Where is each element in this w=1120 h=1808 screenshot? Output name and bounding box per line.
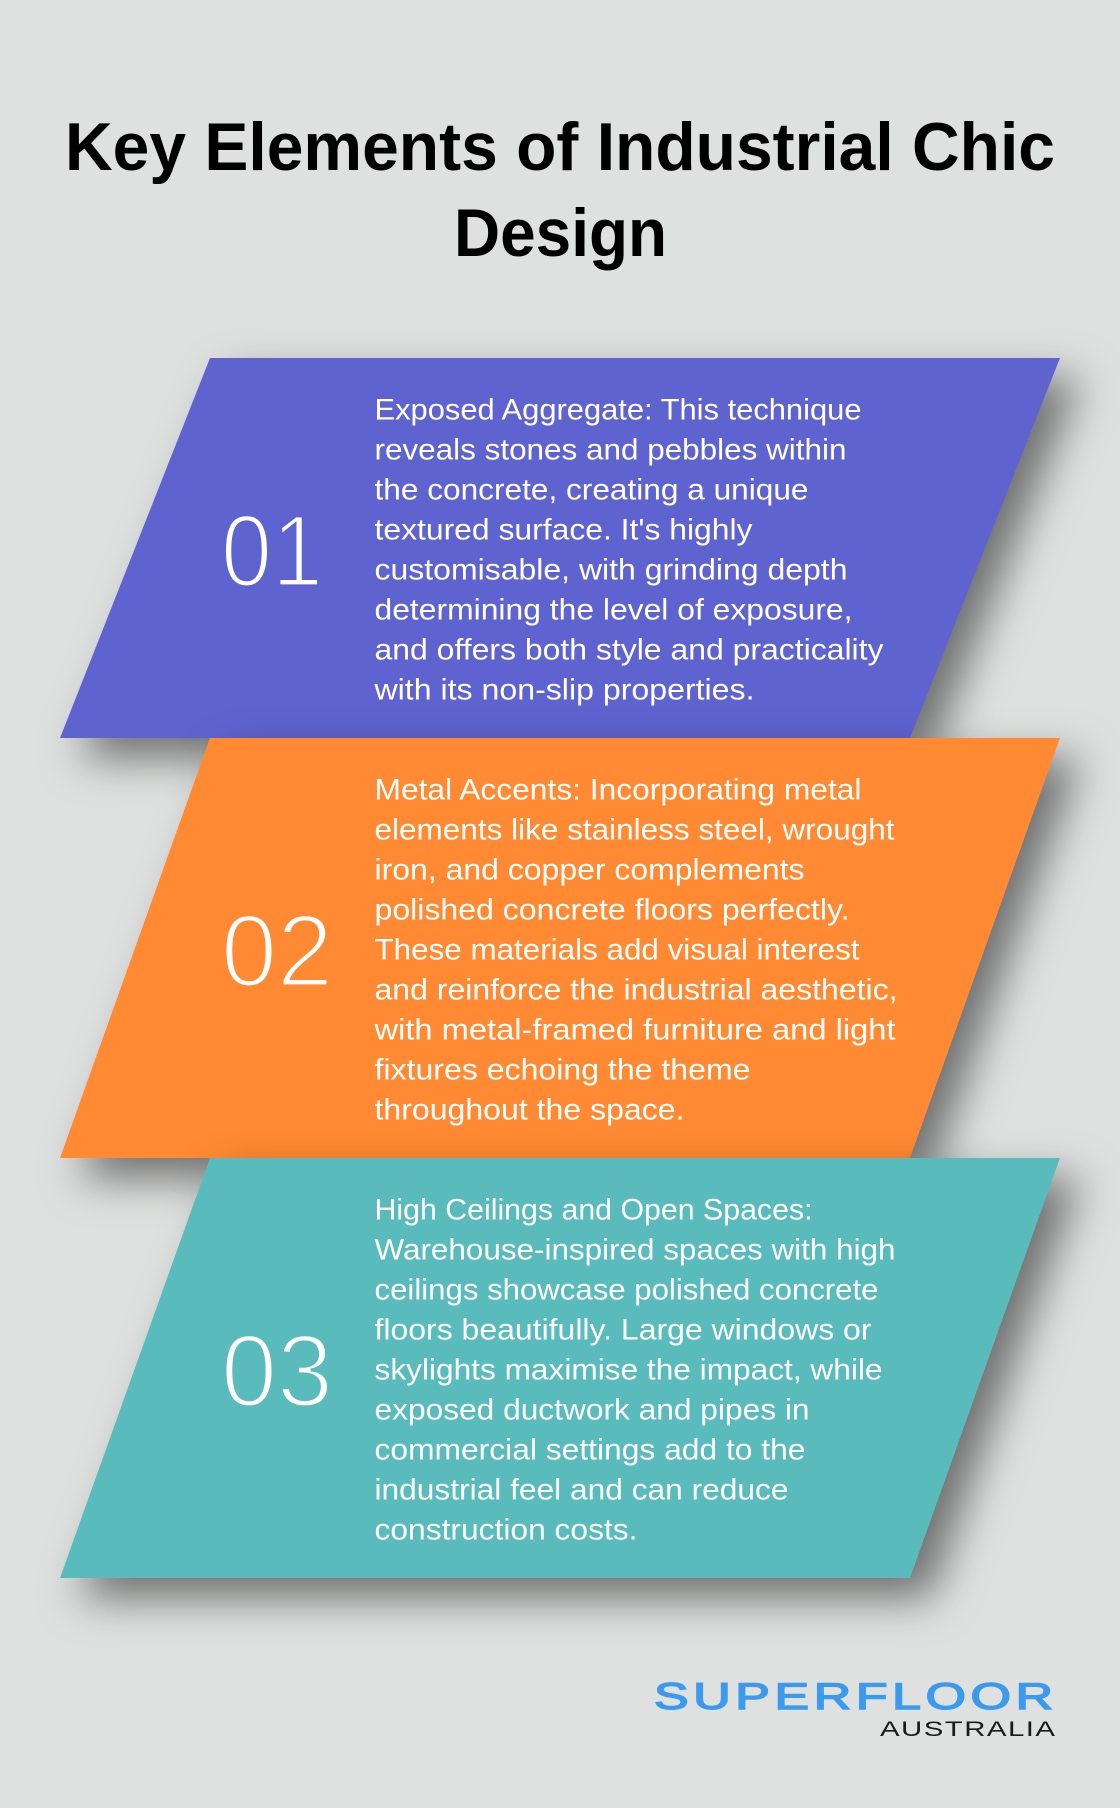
panel 02 body text: throughout the space. xyxy=(374,1094,684,1126)
panel 02 body text: and reinforce the industrial aesthetic, xyxy=(374,974,898,1006)
panel 02 body text: elements like stainless steel, wrought xyxy=(374,814,895,846)
panel 01 body text: customisable, with grinding depth xyxy=(374,554,848,586)
panel 01 body text: with its non-slip properties. xyxy=(373,674,754,706)
title: Design xyxy=(454,195,667,271)
panel 01 body text: and offers both style and practicality xyxy=(374,634,884,666)
panel 03 body text: commercial settings add to the xyxy=(374,1434,806,1466)
title xyxy=(65,109,1055,271)
logo: AUSTRALIA xyxy=(880,1718,1055,1741)
panel: 02 metal accents xyxy=(60,738,1060,1158)
panel 03 number: 03 xyxy=(221,1314,333,1428)
panel 03 body text: floors beautifully. Large windows or xyxy=(374,1314,872,1346)
logo xyxy=(654,1675,1055,1741)
panel 03 body text: Warehouse-inspired spaces with high xyxy=(374,1234,896,1266)
panel 01 number: 01 xyxy=(221,494,323,608)
panel 03 body text: skylights maximise the impact, while xyxy=(374,1354,882,1386)
panel 01 body text: Exposed Aggregate: This technique xyxy=(374,394,862,426)
panel 03 body text: ceilings showcase polished concrete xyxy=(374,1274,878,1306)
panel 02 body text: Metal Accents: Incorporating metal xyxy=(374,774,862,806)
title: Key Elements of Industrial Chic xyxy=(65,109,1055,185)
panel 03 shape xyxy=(60,1158,1060,1578)
panel 02 body text: These materials add visual interest xyxy=(374,934,860,966)
panel 01 body text xyxy=(373,394,884,706)
panel 02 shape xyxy=(60,738,1060,1158)
panel 01 body text: textured surface. It's highly xyxy=(374,514,752,546)
panel 03 body text xyxy=(374,1194,896,1546)
panel 01 body text: the concrete, creating a unique xyxy=(374,474,808,506)
panel 03 body text: exposed ductwork and pipes in xyxy=(374,1394,810,1426)
panel: 03 high ceilings xyxy=(60,1158,1060,1578)
panel 02 body text: with metal-framed furniture and light xyxy=(373,1014,896,1046)
panel 01 shape xyxy=(60,358,1060,738)
panel 02 body text: fixtures echoing the theme xyxy=(374,1054,750,1086)
panel 02 number: 02 xyxy=(221,894,333,1008)
logo: SUPERFLOOR xyxy=(654,1675,1053,1717)
panel 02 body text: iron, and copper complements xyxy=(374,854,804,886)
panel 01 body text: determining the level of exposure, xyxy=(374,594,852,626)
panel 01 body text: reveals stones and pebbles within xyxy=(374,434,846,466)
panel 03 body text: High Ceilings and Open Spaces: xyxy=(374,1194,812,1226)
panel 03 body text: construction costs. xyxy=(374,1514,638,1546)
panel 03 body text: industrial feel and can reduce xyxy=(374,1474,788,1506)
panel: 01 exposed aggregate xyxy=(60,358,1060,738)
panel 02 body text: polished concrete floors perfectly. xyxy=(374,894,850,926)
panel 02 body text xyxy=(373,774,898,1126)
